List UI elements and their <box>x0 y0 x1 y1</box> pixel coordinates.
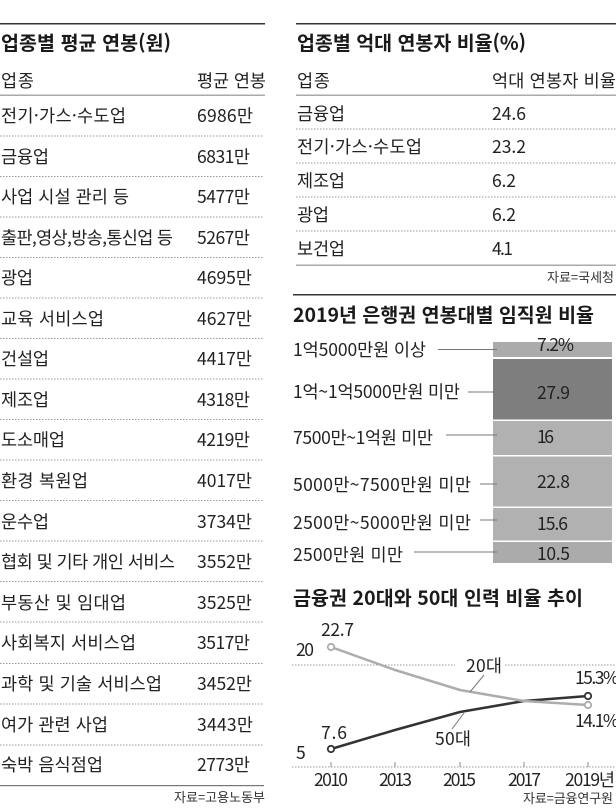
table header: 업종 <box>297 68 330 93</box>
stacked bar: 10.5 <box>537 541 570 566</box>
table rows: 환경 복원업 <box>1 468 88 493</box>
table rows: 사회복지 서비스업 <box>1 630 136 655</box>
table rows: 3443만 <box>197 712 253 737</box>
bar labels with leaders: 2500만원 미만 <box>293 542 403 567</box>
table header: 평균 연봉 <box>197 68 266 93</box>
table rows: 금융업 <box>1 144 49 169</box>
grid and axis: 2017 <box>508 767 541 792</box>
grid and axis: 20 <box>296 637 314 662</box>
stacked bar <box>493 332 612 566</box>
table rows: 운수업 <box>1 509 49 534</box>
table rows: 4417만 <box>197 346 252 371</box>
table rows <box>0 103 264 777</box>
table rows: 23.2 <box>492 134 526 159</box>
stacked bar: 7.2% <box>537 332 574 357</box>
bar labels with leaders: 2500만~5000만원 미만 <box>293 510 471 535</box>
stacked bar: 16 <box>537 424 554 449</box>
table rows: 6831만 <box>197 144 250 169</box>
table rows: 사업 시설 관리 등 <box>1 184 129 209</box>
table rows: 4627만 <box>197 306 252 331</box>
line: age 20s <box>321 617 616 733</box>
table rows: 4695만 <box>197 265 252 290</box>
table rows: 보건업 <box>297 236 345 261</box>
heading: bank salary distribution: 2019년 은행권 연봉대별 임직원 비율 <box>293 299 594 328</box>
grid and axis: 2015 <box>443 767 476 792</box>
table rows: 5477만 <box>197 184 250 209</box>
table rows: 부동산 및 임대업 <box>1 590 126 615</box>
table rows: 협회 및 기타 개인 서비스 <box>1 549 175 574</box>
stacked bar: 15.6 <box>537 511 568 536</box>
table rows: 3734만 <box>197 509 252 534</box>
table rows: 6.2 <box>492 168 516 193</box>
source note: labor ministry: 자료=고용노동부 <box>174 787 265 806</box>
source note: finance institute: 자료=금융연구원 <box>523 788 613 807</box>
table header <box>0 68 266 96</box>
table header: 업종 <box>1 68 34 93</box>
heading: high earners: 업종별 억대 연봉자 비율(%) <box>297 27 526 56</box>
bar labels with leaders: 5000만~7500만원 미만 <box>293 472 471 497</box>
line: age 20s: 22.7 <box>321 617 354 642</box>
table rows: 금융업 <box>297 101 345 126</box>
heading: age trend: 금융권 20대와 50대 인력 비율 추이 <box>293 582 583 611</box>
table rows: 4017만 <box>197 468 252 493</box>
table rows: 여가 관련 사업 <box>1 712 108 737</box>
table rows: 광업 <box>1 265 33 290</box>
stacked bar: 22.8 <box>537 469 570 494</box>
table rows: 제조업 <box>297 168 345 193</box>
table rows: 3517만 <box>197 630 250 655</box>
line: age 20s: 20대 <box>466 653 502 678</box>
grid and axis <box>292 637 616 792</box>
table rows: 전기·가스·수도업 <box>297 134 422 159</box>
bar labels with leaders: 1억5000만원 이상 <box>293 337 426 362</box>
table rows: 출판,영상,방송,통신업 등 <box>1 225 173 250</box>
source note: tax service: 자료=국세청 <box>547 267 614 286</box>
table rows: 3525만 <box>197 590 252 615</box>
table rows: 6.2 <box>492 202 516 227</box>
table rows: 24.6 <box>492 101 526 126</box>
table rows: 3552만 <box>197 549 252 574</box>
table header: 억대 연봉자 비율 <box>492 68 616 93</box>
table rows: 4318만 <box>197 387 250 412</box>
table rows: 건설업 <box>1 346 49 371</box>
heading: average salary: 업종별 평균 연봉(원) <box>1 27 171 56</box>
line: age 50s: 50대 <box>435 726 471 751</box>
table header <box>296 68 616 96</box>
line: age 50s <box>321 665 616 752</box>
table rows: 전기·가스·수도업 <box>1 103 126 128</box>
line: age 50s: 7.6 <box>321 720 347 745</box>
table rows <box>296 101 616 261</box>
table rows: 4219만 <box>197 427 250 452</box>
table rows: 6986만 <box>197 103 253 128</box>
bar labels with leaders <box>293 337 497 567</box>
table rows: 교육 서비스업 <box>1 306 104 331</box>
stacked bar: 27.9 <box>537 380 570 405</box>
bar labels with leaders: 7500만~1억원 미만 <box>293 425 433 450</box>
table rows: 도소매업 <box>1 427 65 452</box>
panel: average salary table <box>0 23 266 806</box>
table rows: 광업 <box>297 202 329 227</box>
table rows: 과학 및 기술 서비스업 <box>1 671 162 696</box>
panel: finance age line chart <box>292 582 616 807</box>
panel: bank salary distribution <box>293 299 612 567</box>
grid and axis: 2010 <box>314 767 348 792</box>
table rows: 4.1 <box>492 236 513 261</box>
grid and axis: 5 <box>296 740 306 765</box>
bar labels with leaders: 1억~1억5000만원 미만 <box>293 379 460 404</box>
grid and axis: 2013 <box>379 767 412 792</box>
grid and axis: 2019년 <box>565 767 615 792</box>
table rows: 제조업 <box>1 387 49 412</box>
table rows: 2773만 <box>197 752 250 777</box>
table rows: 5267만 <box>197 225 250 250</box>
table rows: 숙박 음식점업 <box>1 752 103 777</box>
table rows: 3452만 <box>197 671 252 696</box>
panel: high earners table <box>296 23 616 286</box>
